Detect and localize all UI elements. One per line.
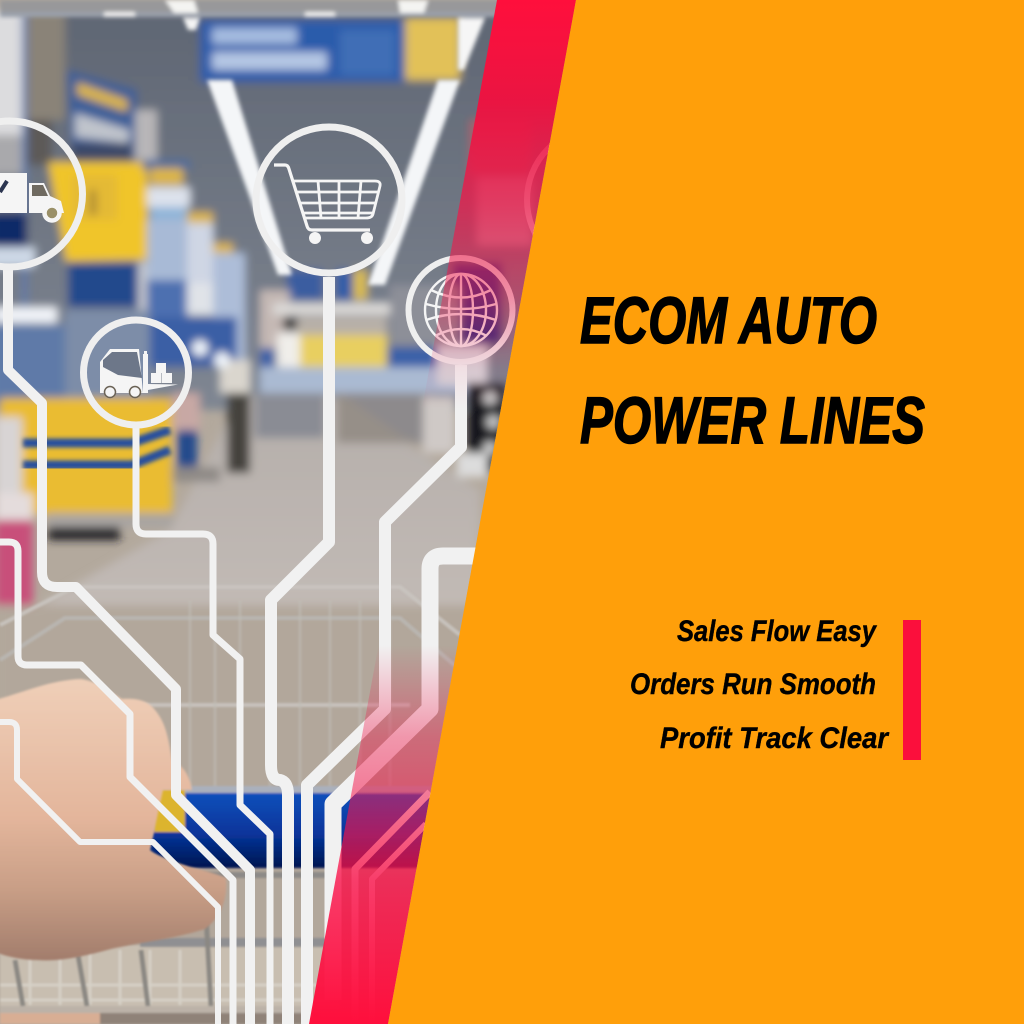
tagline list: Profit Track Clear (660, 722, 890, 755)
thick line from the right (333, 556, 480, 1000)
shopping cart wires (0, 587, 460, 790)
title: ECOM AUTO (580, 283, 877, 357)
left upper line (0, 542, 233, 1024)
cart handle (148, 786, 450, 878)
icon circle: truck (0, 121, 82, 267)
icon circle: shopping cart (256, 127, 402, 273)
red accent bar (903, 620, 921, 760)
red translucent diagonal band (309, 0, 576, 1024)
partial icon circle hidden by the panel edge (527, 127, 673, 273)
line from truck circle (8, 270, 250, 1024)
background photo: blurred supermarket aisle with cart and hand (0, 0, 580, 1024)
band line one (355, 792, 430, 1024)
orange panel (388, 0, 1024, 1024)
counter stripes (23, 430, 170, 465)
line from globe circle (307, 365, 461, 1024)
band line two (372, 824, 426, 1024)
tagline list: Orders Run Smooth (630, 668, 876, 701)
left lower line (0, 722, 218, 1024)
circuit lines (0, 270, 480, 1024)
icon circle: globe (408, 258, 512, 362)
tagline list (630, 615, 890, 755)
icon circle: forklift (84, 320, 188, 425)
top ceiling strip with lights (0, 0, 500, 285)
lower cart basket and floor (0, 926, 324, 1024)
tagline list: Sales Flow Easy (677, 615, 877, 648)
title (580, 283, 925, 457)
line from forklift circle (136, 428, 270, 1024)
line from cart circle (271, 277, 329, 1024)
hand gripping the handle (0, 679, 226, 960)
